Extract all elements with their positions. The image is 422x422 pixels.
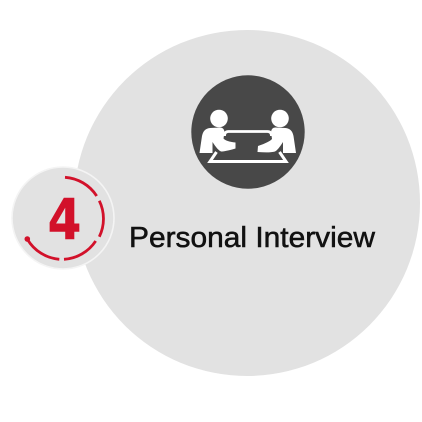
panel: large grey circle — [74, 30, 420, 376]
right person — [258, 110, 296, 153]
table base — [210, 152, 286, 162]
icon: interview in dark circle — [191, 75, 305, 189]
step number: 4 — [48, 189, 81, 253]
badge background — [12, 167, 114, 269]
left person — [200, 110, 236, 153]
icon background circle — [191, 75, 305, 189]
ring end dot — [24, 236, 30, 242]
title: Personal Interview — [129, 222, 376, 254]
dashed red ring — [28, 177, 103, 259]
badge: step number circle — [12, 167, 114, 269]
table top — [224, 132, 272, 136]
